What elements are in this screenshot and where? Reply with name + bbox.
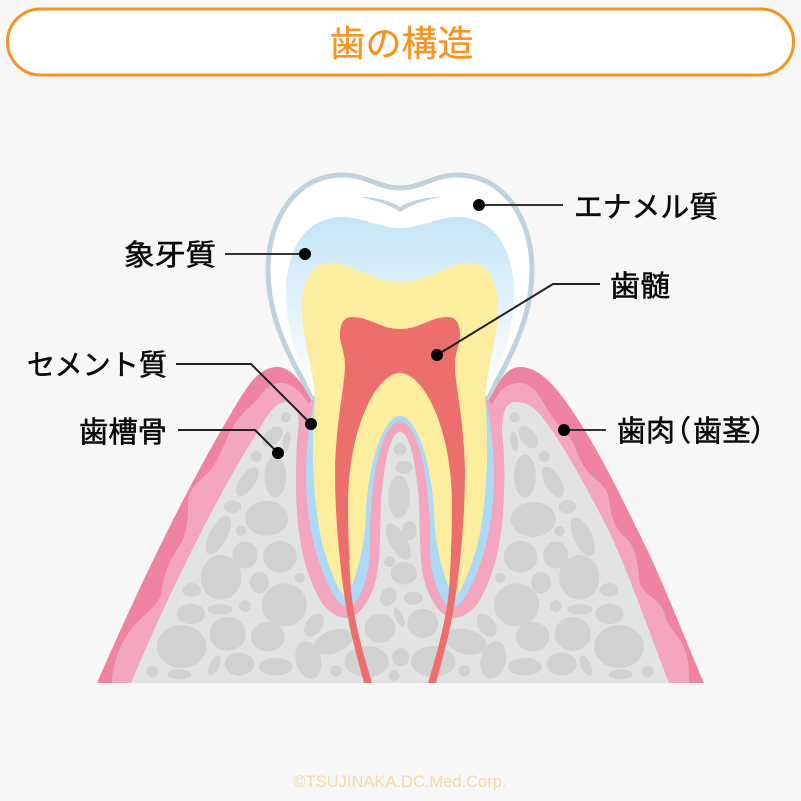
alveolar bone — [131, 402, 669, 683]
leader: dentin — [225, 248, 311, 260]
bone spongy blobs left — [147, 413, 355, 681]
crown groove — [360, 197, 441, 212]
periodontal ligament — [296, 400, 504, 618]
label: pulp: 歯髄 — [610, 263, 670, 305]
title — [8, 9, 794, 75]
label: gum: 歯肉 — [617, 408, 675, 450]
bone spongy blobs between roots — [345, 444, 455, 681]
gum inner layer — [112, 383, 689, 683]
dentin — [286, 217, 514, 396]
label: enamel: エナメル質 — [574, 184, 718, 226]
bone spongy blobs right — [444, 413, 653, 681]
leader: cementum — [176, 364, 317, 430]
label: gum: 歯茎 — [693, 408, 751, 450]
leader: enamel — [473, 199, 563, 211]
leader: gum — [558, 424, 606, 436]
title: 歯の構造 — [329, 15, 474, 67]
pulp and root canals — [335, 317, 465, 683]
gum outer layer — [97, 367, 704, 683]
cementum — [306, 400, 494, 608]
copyright: ©TSUJINAKA.DC.Med.Corp. — [294, 773, 506, 791]
enamel crown — [268, 175, 532, 398]
label: dentin: 象牙質 — [124, 232, 216, 274]
leader: pulp — [431, 284, 600, 361]
dentin yellow — [302, 263, 498, 598]
label: gum: ） — [750, 408, 779, 450]
label: alveolar bone: 歯槽骨 — [79, 409, 167, 451]
label: cementum: セメント質 — [27, 342, 167, 384]
label: gum: （ — [662, 408, 691, 450]
tooth and gum diagram — [97, 175, 704, 683]
leader: alveolar bone — [178, 430, 284, 459]
